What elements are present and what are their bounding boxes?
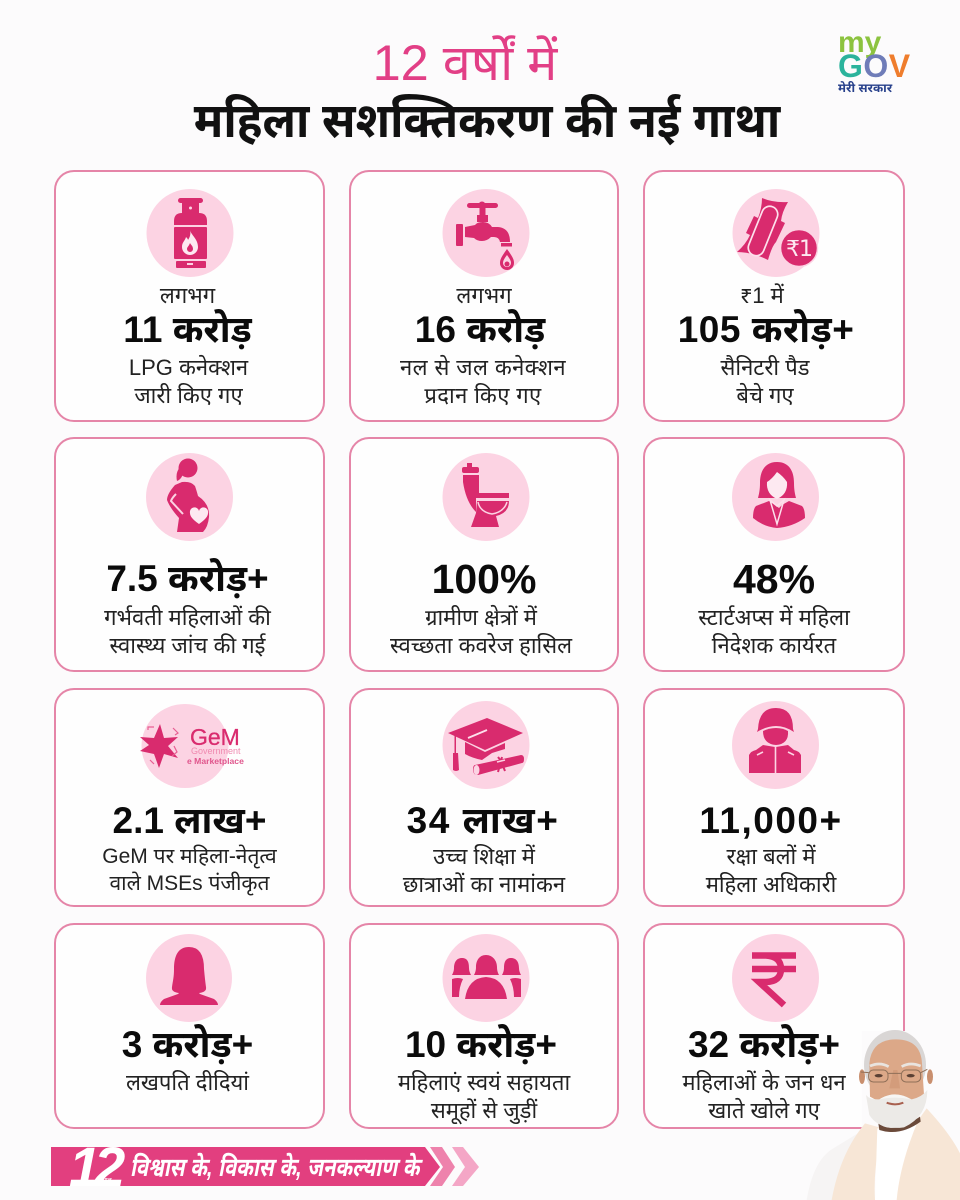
panel: women officers in defence xyxy=(643,688,905,907)
logo: MyGov xyxy=(838,26,911,95)
description xyxy=(102,844,277,896)
description: बेचे गए xyxy=(736,383,794,408)
description xyxy=(682,1070,846,1123)
icon: water tap xyxy=(442,189,530,277)
icon: sanitary pad and rupee coin xyxy=(732,189,820,277)
description: नल से जल कनेक्शन xyxy=(400,355,566,380)
stat value: 100% xyxy=(432,556,536,602)
description xyxy=(129,354,248,408)
description: उच्च शिक्षा में xyxy=(433,844,535,869)
stat value: 3 करोड़+ xyxy=(122,1024,253,1065)
icon: businesswoman xyxy=(732,453,819,541)
description xyxy=(698,605,850,658)
icon: woman silhouette xyxy=(146,934,232,1022)
portrait illustration xyxy=(832,1030,960,1200)
icon: toilet xyxy=(442,453,530,541)
stat value: 48% xyxy=(733,556,815,602)
panel: pregnant women check-ups xyxy=(54,437,325,672)
description: GeM पर महिला-नेतृत्व xyxy=(102,845,277,868)
icon: GeM logo xyxy=(140,704,244,788)
description: महिलाएं स्वयं सहायता xyxy=(398,1070,570,1095)
panel: LPG connections xyxy=(54,170,325,422)
stat value: 7.5 करोड़+ xyxy=(106,558,269,599)
stat value: 34 लाख+ xyxy=(407,800,559,841)
description xyxy=(400,354,566,408)
description: LPG कनेक्शन xyxy=(129,355,248,380)
description: वाले MSEs पंजीकृत xyxy=(109,872,270,895)
description xyxy=(706,844,837,897)
panel: sanitary pads xyxy=(643,170,905,422)
panel: rural sanitation xyxy=(349,437,619,672)
description xyxy=(720,355,810,408)
logo: MyGov: my xyxy=(838,26,881,59)
icon: soldier xyxy=(732,701,819,789)
stat value: 2.1 लाख+ xyxy=(113,800,266,841)
description: निदेशक कार्यरत xyxy=(712,633,836,658)
panel: GeM women-led MSEs xyxy=(54,688,325,907)
description: समूहों से जुड़ीं xyxy=(431,1098,537,1123)
description: सैनिटरी पैड xyxy=(721,355,809,380)
description: छात्राओं का नामांकन xyxy=(403,872,565,897)
title line 2: महिला सशक्तिकरण की नई गाथा xyxy=(194,95,780,148)
icon: pregnant woman xyxy=(146,453,233,541)
icon: LPG cylinder xyxy=(146,189,234,277)
description: खाते खोले गए xyxy=(708,1098,820,1123)
description: रक्षा बलों में xyxy=(726,844,816,869)
icon: sanitary pad and rupee coin: ₹1 xyxy=(786,237,812,262)
description: प्रदान किए गए xyxy=(424,383,542,408)
stat prefix: लगभग xyxy=(456,283,512,308)
icon: rupee symbol xyxy=(732,934,819,1022)
description: महिला अधिकारी xyxy=(706,872,836,897)
description xyxy=(390,604,572,658)
panel: women directors in startups xyxy=(643,437,905,672)
banner shape xyxy=(51,1147,479,1186)
description: महिलाओं के जन धन xyxy=(682,1070,846,1095)
description xyxy=(104,605,272,658)
stat prefix: लगभग xyxy=(160,283,215,308)
description: गर्भवती महिलाओं की xyxy=(104,605,271,630)
big number 12: 12 xyxy=(69,1135,119,1198)
description: स्टार्टअप्स में महिला xyxy=(698,605,850,630)
panel: tap water xyxy=(349,170,619,422)
banner: footer tagline xyxy=(51,1135,479,1198)
stat value: 105 करोड़+ xyxy=(678,309,854,350)
description xyxy=(398,1070,570,1124)
description: स्वच्छता कवरेज हासिल xyxy=(390,633,572,658)
stat value: 16 करोड़ xyxy=(415,309,545,350)
tagline text: विश्वास के, विकास के, जनकल्याण के xyxy=(130,1152,420,1182)
title line 1: 12 वर्षों में xyxy=(373,35,557,91)
icon: group of women xyxy=(442,934,530,1022)
panel: women in higher education xyxy=(349,688,619,907)
description: लखपति दीदियां xyxy=(126,1070,249,1095)
description: स्वास्थ्य जांच की गई xyxy=(110,633,265,658)
logo: MyGov: GOV xyxy=(838,48,911,84)
logo: MyGov: मेरी सरकार xyxy=(838,81,892,95)
stat prefix: ₹1 में xyxy=(740,283,784,308)
small label saal: साल xyxy=(102,1178,112,1184)
panel: Jan Dhan accounts xyxy=(643,923,905,1129)
description xyxy=(402,844,566,897)
icon: graduation cap and diploma xyxy=(442,701,530,789)
panel: Lakhpati Didis xyxy=(54,923,325,1129)
icon: GeM logo: Government xyxy=(191,746,241,756)
title xyxy=(194,35,781,148)
stat value: 11,000+ xyxy=(699,800,843,841)
description: जारी किए गए xyxy=(134,383,243,408)
panel: self-help groups xyxy=(349,923,619,1129)
stat value: 32 करोड़+ xyxy=(688,1024,840,1065)
description: ग्रामीण क्षेत्रों में xyxy=(425,605,537,630)
icon: GeM logo: e Marketplace xyxy=(187,756,244,766)
stat value: 10 करोड़+ xyxy=(405,1024,557,1065)
icon: GeM logo: GeM xyxy=(190,724,240,750)
stat value: 11 करोड़ xyxy=(123,309,252,350)
